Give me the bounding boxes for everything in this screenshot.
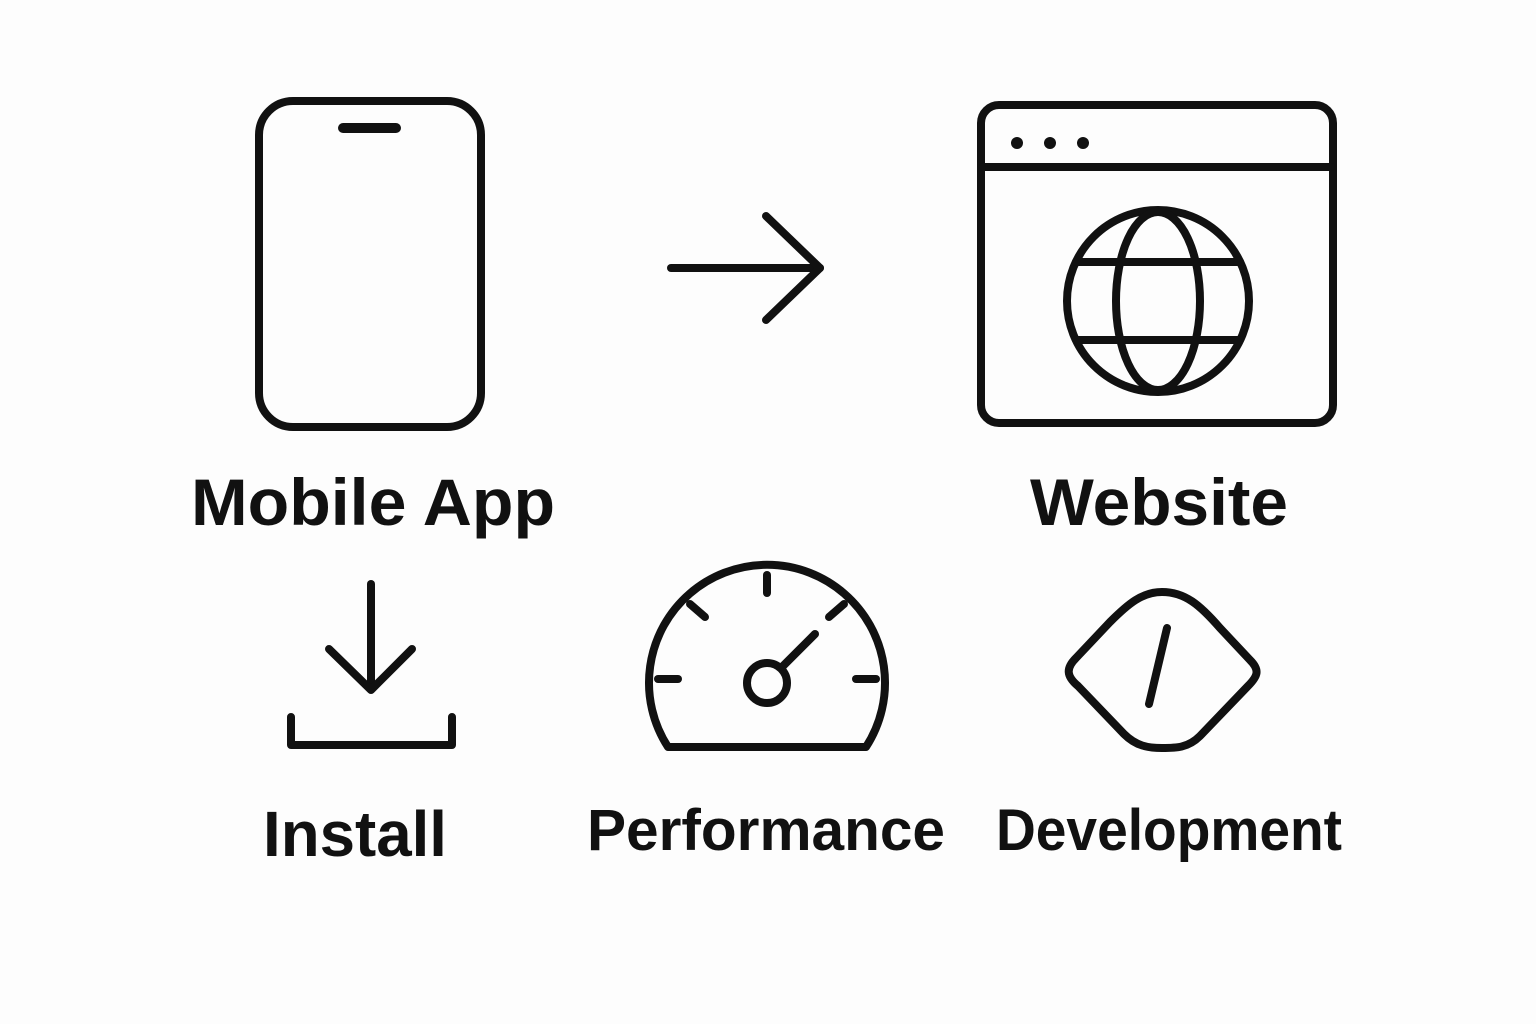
label: Performance: Performance xyxy=(587,798,945,863)
icon: performance speedometer xyxy=(649,565,885,747)
icon: mobile phone xyxy=(259,101,481,427)
icon: browser window with globe xyxy=(981,105,1333,423)
label: Mobile App: Mobile App xyxy=(191,465,555,539)
icon: install download xyxy=(291,584,452,745)
icon: development diamond xyxy=(1069,592,1257,748)
label: Website: Website xyxy=(1030,465,1288,539)
label: Install: Install xyxy=(263,798,447,870)
arrow: mobile to website xyxy=(671,216,820,320)
label: Development: Development xyxy=(996,798,1342,863)
